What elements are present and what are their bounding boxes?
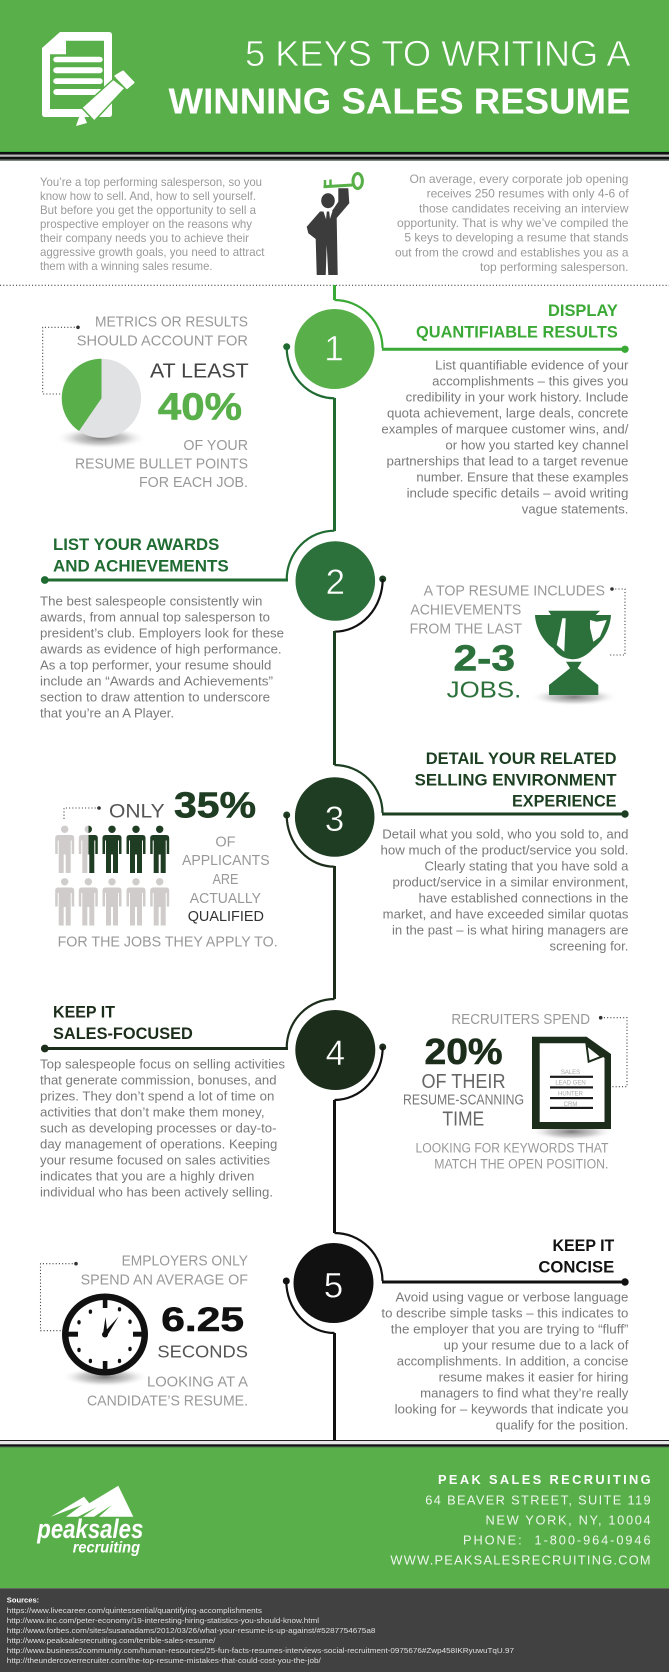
heading: keep it concise: CONCISE [538,1259,614,1277]
body text step 4: your resume focused on sales activities [40,1152,271,1167]
icon: people row 2 [55,878,169,926]
body text step 3: Detail what you sold, who you sold to, and [382,826,628,841]
callout: 6.25 seconds: EMPLOYERS ONLY [122,1254,248,1270]
callout: 2-3 jobs: 2-3 [454,638,515,679]
body text step 1: quota achievement, large deals, concrete [387,405,628,420]
body text step 4: indicates that you are a highly driven [40,1168,254,1183]
body text step 1: number. Ensure that these examples [416,469,629,484]
body text step 3: how much of the product/service you sold. [380,842,628,857]
callout: 35 percent: 35% [174,784,256,825]
body text step 4: day management of operations. Keeping [40,1136,277,1151]
body text step 4: that generate commission, bonuses, and [40,1072,276,1087]
callout: 2-3 jobs: A TOP RESUME INCLUDES [424,583,605,599]
callout: 2-3 jobs [410,583,625,706]
callout: 6.25 seconds: SPEND AN AVERAGE OF [81,1273,248,1289]
callout: 35 percent: ARE [212,872,239,888]
sources panel: Sources: [7,1596,39,1605]
callout: 40 percent [43,315,249,491]
intro text left: aggressive growth goals, you need to attract [40,245,265,259]
step 2 badge [296,541,375,621]
body text step 2: As a top performer, your resume should [40,657,271,672]
callout: 40 percent: FOR EACH JOB. [139,475,248,491]
body text step 2: awards, from annual top salesperson to [40,609,270,624]
body text step 2: that you’re an A Player. [40,705,174,720]
intro text right: 5 keys to developing a resume that stands [404,231,628,245]
callout: 35 percent: ONLY [109,800,165,822]
callout: 6.25 seconds: SECONDS [157,1341,248,1361]
heading: list your awards and achievements: LIST YOUR AWARDS [53,536,219,554]
contact details: PHONE: 1-800-964-0946 [463,1532,651,1547]
body text step 1: include specific details – avoid writing [407,485,628,500]
callout: 2-3 jobs: JOBS. [447,677,521,703]
heading: keep it concise: KEEP IT [552,1237,614,1255]
contact details: PEAK SALES RECRUITING [438,1472,651,1487]
body text step 4: prizes. They don’t spend a lot of time on [40,1088,274,1103]
icon: people row 1 [55,826,169,873]
icon: resume document [530,1037,614,1141]
intro text right: On average, every corporate job opening [410,172,628,186]
intro text left: But before you get the opportunity to sell a [40,203,256,217]
sources panel: http://www.peaksalesrecruiting.com/terrible-sales-resume/ [7,1636,216,1645]
sources panel: http://theundercoverrecruiter.com/the-top-resume-mistakes-that-could-cost-you-the-job/ [7,1656,322,1665]
callout: 35 percent: FOR THE JOBS THEY APPLY TO. [58,935,278,951]
contact details [390,1472,651,1567]
step 2 badge: 2 [326,563,345,602]
icon: resume and pencil [42,32,134,126]
body text step 2: president’s club. Employers look for these [40,625,284,640]
title: WINNING SALES RESUME [168,80,630,121]
body text step 1: accomplishments – this gives you [432,373,628,388]
heading: list your awards and achievements [53,536,229,575]
step 3 badge [295,777,375,857]
icon: businessman holding key [307,174,362,275]
callout: 20 percent: TIME [442,1109,484,1131]
timeline connector 3 [334,576,629,818]
title [168,33,630,121]
callout: 35 percent: OF [215,834,236,850]
heading: keep it sales-focused [53,1004,193,1043]
pie chart [55,359,147,449]
callout: 20 percent: MATCH THE OPEN POSITION. [434,1157,608,1172]
heading: keep it sales-focused: KEEP IT [53,1004,115,1022]
title: 5 KEYS TO WRITING A [245,33,630,74]
footer panel [0,1448,669,1588]
body text step 5: Avoid using vague or verbose language [396,1290,628,1305]
body text step 5: managers to find what they’re really [420,1386,629,1401]
body text step 1: List quantifiable evidence of your [435,357,629,372]
body text step 5: accomplishments. In addition, a concise [397,1354,628,1369]
callout: 20 percent: OF THEIR [422,1071,506,1093]
body text step 1: examples of marquee customer wins, and/ [381,421,629,436]
body text step 4 [40,1056,286,1199]
timeline connector 1 [334,285,629,353]
intro text right [395,172,629,274]
sources panel: http://www.inc.com/peter-economy/19-interesting-hiring-statistics-you-should-know.html [7,1616,319,1625]
heading: detail your related selling environment experience [415,750,617,811]
icon: resume document: CRM [564,1102,577,1108]
icon: trophy [530,611,618,706]
heading: detail your related selling environment experience: EXPERIENCE [512,793,616,811]
sources panel: https://www.livecareer.com/quintessential/quantifying-accomplishments [7,1606,262,1615]
intro text left: their company needs you to achieve their [40,231,249,245]
callout: 20 percent: RECRUITERS SPEND [451,1012,590,1028]
body text step 2 [40,593,284,720]
dotted divider [0,284,669,286]
timeline connector 5 [334,1044,629,1286]
icon: resume document: LEAD GEN [555,1081,586,1087]
body text step 4: activities that don’t make them money, [40,1104,264,1119]
body text step 5: resume makes it easier for hiring [439,1370,628,1385]
heading: display quantifiable results [416,302,618,341]
body text step 2: The best salespeople consistently win [40,593,262,608]
heading: display quantifiable results: DISPLAY [548,302,618,320]
icon: resume document: HUNTER [558,1091,584,1097]
heading: display quantifiable results: QUANTIFIABLE RESULTS [416,323,618,341]
logo: peak sales recruiting: recruiting [73,1539,140,1556]
heading: keep it concise [538,1237,614,1277]
body text step 2: awards as evidence of high performance. [40,641,282,656]
body text step 1: vague statements. [522,501,628,516]
body text step 3: screening for. [550,938,628,953]
callout: 40 percent: AT LEAST [150,360,249,383]
sources panel [0,1588,669,1672]
callout: 20 percent: RESUME-SCANNING [403,1092,524,1108]
header banner [0,0,669,161]
body text step 5: looking for – keywords that indicate you [395,1402,628,1417]
logo: peak sales recruiting: peaksales [36,1514,143,1544]
intro text left: them with a winning sales resume. [40,259,212,273]
body text step 1: or how you started key channel [445,437,629,452]
callout: 2-3 jobs: FROM THE LAST [410,621,522,637]
intro text left: You’re a top performing salesperson, so you [40,175,262,189]
body text step 2: section to draw attention to underscore [40,689,270,704]
body text step 4: individual who has been actively selling. [40,1184,273,1199]
timeline connector 2 [41,343,335,584]
callout: 2-3 jobs: ACHIEVEMENTS [410,602,521,618]
callout: 6.25 seconds: CANDIDATE’S RESUME. [87,1394,248,1410]
body text step 2: include an “Awards and Achievements” [40,673,273,688]
icon: clock [61,1294,149,1387]
body text step 1: partnerships that lead to a target revenue [386,453,628,468]
callout: 6.25 seconds [40,1254,248,1410]
body text step 5: qualify for the position. [496,1418,628,1433]
body text step 3: in the past – is what hiring managers are [392,922,628,937]
heading: detail your related selling environment experience: SELLING ENVIRONMENT [415,771,616,789]
callout: 40 percent: OF YOUR [183,438,248,454]
intro text right: receives 250 resumes with only 4-6 of [427,187,629,201]
sources panel: http://www.business2community.com/human-resources/25-fun-facts-resumes-interviews-social-recruitment-0975676#Zwp458IKRyuwuTqU.97 [7,1646,514,1655]
contact details: WWW.PEAKSALESRECRUITING.COM [390,1552,651,1567]
step 4 badge [295,1010,375,1090]
contact details: NEW YORK, NY, 10004 [486,1512,651,1527]
callout: 35 percent: APPLICANTS [182,853,270,869]
step 5 badge [294,1243,374,1323]
body text step 5: the employer that you are trying to “fluff” [391,1322,628,1337]
body text step 3: product/service in a similar environment, [392,874,628,889]
callout: 6.25 seconds: 6.25 [161,1301,244,1339]
body text step 4: Top salespeople focus on selling activities [40,1056,286,1071]
heading: keep it sales-focused: SALES-FOCUSED [53,1025,193,1043]
sources panel: http://www.forbes.com/sites/susanadams/2012/03/26/what-your-resume-is-up-against/#5287754675a8 [7,1626,375,1635]
callout: 20 percent: LOOKING FOR KEYWORDS THAT [416,1141,608,1156]
logo: peak sales recruiting [36,1486,143,1556]
callout: 6.25 seconds: LOOKING AT A [147,1375,248,1391]
body text step 5: up your resume due to a lack of [444,1338,629,1353]
body text step 4: such as developing processes or day-to- [40,1120,276,1135]
callout: 40 percent: RESUME BULLET POINTS [75,456,248,472]
intro text right: top performing salesperson. [480,260,628,274]
intro text right: those candidates receiving an interview [419,201,629,215]
step 4 badge: 4 [326,1034,345,1073]
heading: detail your related selling environment experience: DETAIL YOUR RELATED [426,750,617,768]
step 1 badge: 1 [324,330,344,369]
step 3 badge: 3 [325,800,344,839]
callout: 35 percent: QUALIFIED [188,909,264,925]
intro text right: out from the crowd and establishes you as a [395,245,629,259]
body text step 1 [381,357,629,516]
icon: resume document: SALES [561,1070,580,1076]
intro text left: know how to sell. And, how to sell yourself. [40,189,256,203]
heading: list your awards and achievements: AND ACHIEVEMENTS [53,557,229,575]
body text step 3 [380,826,629,953]
callout: 40 percent: METRICS OR RESULTS [95,315,248,331]
body text step 3: Clearly stating that you have sold a [424,858,629,873]
callout: 35 percent [55,784,278,951]
timeline connector end [283,1278,334,1441]
footer stripes [0,1440,669,1448]
intro text left: prospective employer on the reasons why [40,217,252,231]
body text step 5: to describe simple tasks – this indicates to [381,1306,628,1321]
callout: 40 percent: SHOULD ACCOUNT FOR [77,334,248,350]
body text step 1: credibility in your work history. Include [406,389,628,404]
body text step 3: market, and have exceeded similar quotas [383,906,629,921]
callout: 40 percent: 40% [158,386,242,428]
body text step 3: have established connections in the [418,890,628,905]
step 5 badge: 5 [324,1267,343,1306]
contact details: 64 BEAVER STREET, SUITE 119 [425,1492,651,1507]
body text step 5 [381,1290,629,1433]
intro text right: opportunity. That is why we’ve compiled the [397,216,629,230]
callout: 35 percent: ACTUALLY [190,891,261,907]
intro text left [40,175,265,273]
callout: 20 percent: 20% [424,1031,503,1072]
timeline connector 4 [41,812,335,1052]
callout: 20 percent [403,1012,627,1172]
step 1 badge [294,309,374,389]
